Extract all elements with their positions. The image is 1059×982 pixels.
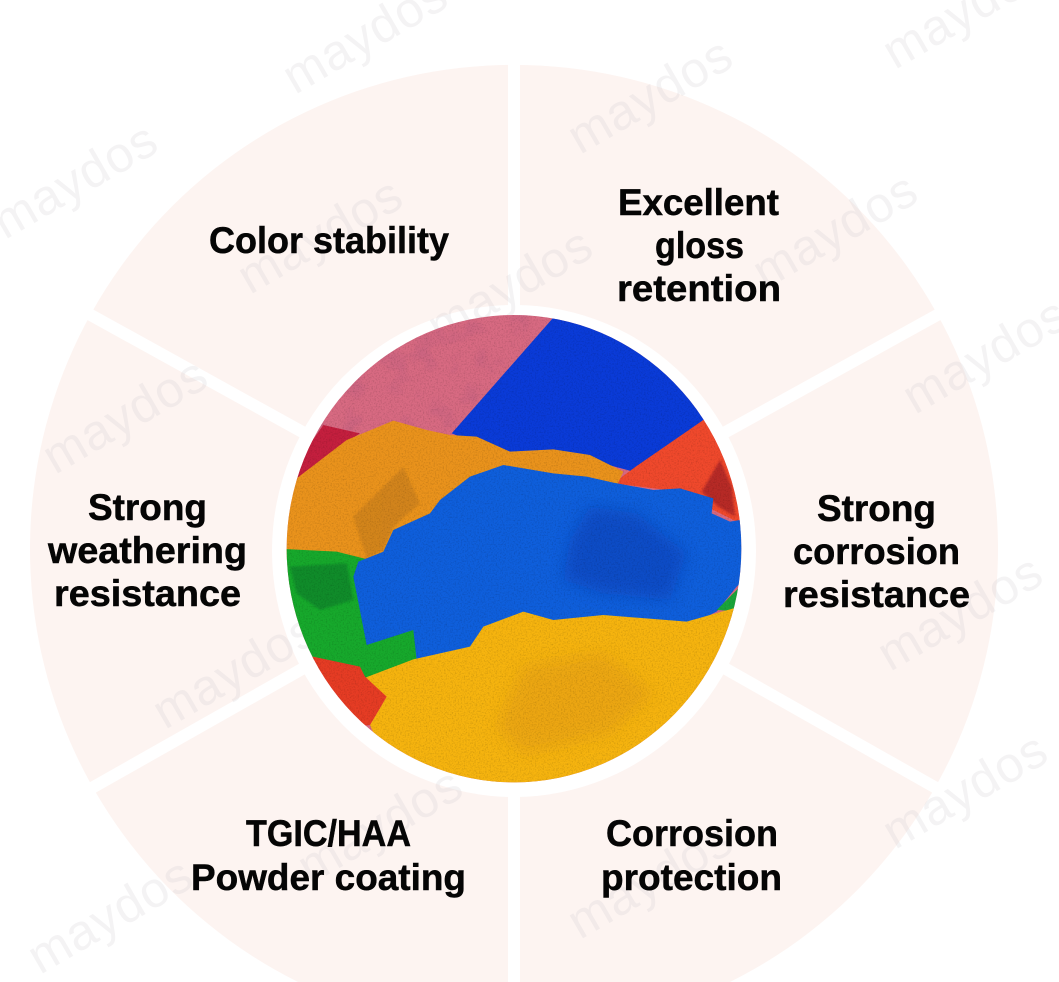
central photo: piles of coloured powder [286,315,742,782]
label: excellent gloss retention: retention [617,268,781,309]
green shade [290,563,353,610]
label: excellent gloss retention: Excellent [618,182,779,223]
crimson powder [296,425,360,480]
label: TGIC/HAA powder coating [191,813,466,898]
watermarks: maydos [872,720,1057,860]
watermarks: maydos [18,845,202,982]
label: TGIC/HAA powder coating: TGIC/HAA [246,813,411,854]
label: strong weathering resistance [47,487,247,614]
deep blue powder [452,318,704,471]
label: strong corrosion resistance: corrosion [793,531,960,572]
label: corrosion protection [601,813,782,898]
watermarks: maydos [32,345,217,485]
green powder [286,549,416,678]
label: corrosion protection: Corrosion [606,813,778,854]
label: strong weathering resistance: resistance [54,573,241,614]
watermarks: maydos [288,755,472,895]
watermarks: maydos [418,215,602,355]
watermarks: maydos [142,600,327,740]
small green strip [716,588,738,611]
watermarks: maydos [868,542,1052,682]
yellow mound shade [501,657,645,750]
watermarks: maydos [558,25,742,165]
label: corrosion protection: protection [601,857,782,898]
label: strong corrosion resistance: resistance [783,574,970,615]
watermarks: maydos [558,810,742,950]
blue mound shade [563,507,687,600]
label: TGIC/HAA powder coating: Powder coating [191,857,466,898]
watermarks: maydos [742,160,927,300]
orange mound shade [353,467,420,558]
label: strong weathering resistance: Strong [88,487,207,528]
red powder [312,656,387,726]
label: color stability: Color stability [209,220,449,261]
label: strong corrosion resistance: Strong [817,488,936,529]
yellow mound [366,608,734,782]
powder grain [287,315,741,782]
pink powder texture [316,315,527,433]
dark red shadow [702,460,735,517]
label: strong corrosion resistance [783,488,970,615]
orange mound [270,421,623,567]
bright blue mound [353,465,760,660]
label: strong weathering resistance: weathering [47,530,247,571]
watermarks: maydos [228,165,412,305]
red-orange powder [618,420,740,523]
label: excellent gloss retention [617,182,781,309]
label: excellent gloss retention: gloss [655,225,744,266]
